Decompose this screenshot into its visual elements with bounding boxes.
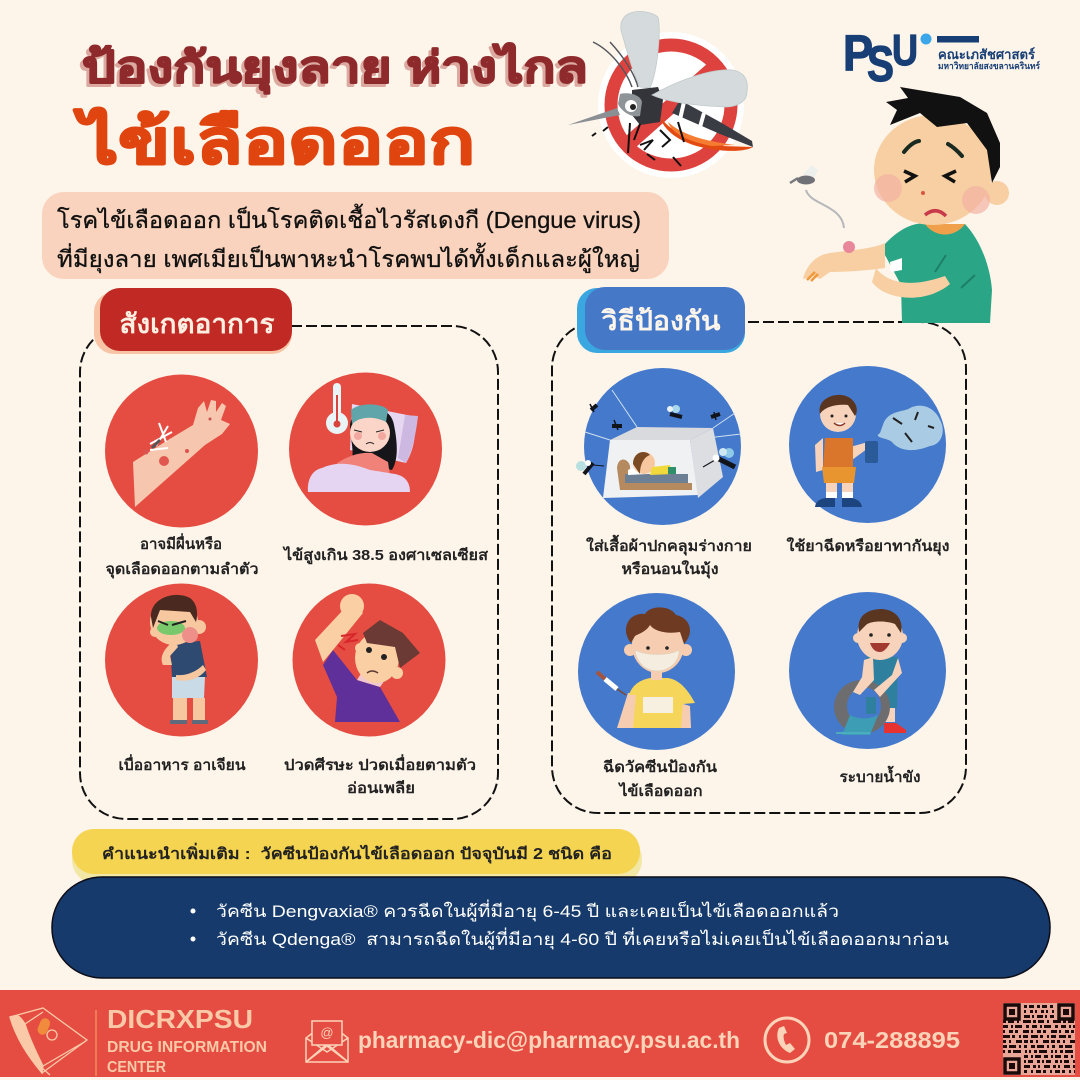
icon: phone	[765, 1018, 809, 1062]
callout: extra advice heading: คำแนะนำเพิ่มเติม : วัคซีนป้องกันไข้เลือดออก ปัจจุบันมี 2 ชนิด คือ	[102, 842, 612, 864]
caption: clothing and net	[586, 534, 752, 579]
panel: symptoms	[80, 288, 498, 819]
mosquitoes around net	[576, 404, 735, 474]
dashed frame: prevention	[552, 322, 966, 813]
email: pharmacy-dic@pharmacy.psu.ac.th	[358, 1027, 740, 1053]
title line 2: ไข้เลือดออก	[73, 107, 475, 176]
caption: fever: ไข้สูงเกิน 38.5 องศาเซลเซียส	[282, 545, 489, 565]
heading: prevention	[577, 287, 745, 353]
heading: symptoms	[94, 288, 292, 354]
caption: vaccination: ไข้เลือดออก	[617, 781, 702, 800]
intro callout	[42, 192, 669, 279]
panel: prevention	[552, 287, 966, 813]
caption: vaccination: ฉีดวัคซีนป้องกัน	[603, 759, 718, 776]
icon: no mosquito sign	[568, 11, 753, 178]
dashed frame: symptoms	[80, 326, 498, 819]
icon: high fever	[289, 372, 442, 526]
caption: drain water: ระบายน้ำขัง	[840, 765, 920, 786]
caption: headache: อ่อนเพลีย	[347, 780, 415, 797]
caption: vaccination	[603, 759, 718, 800]
icon: vomiting boy	[105, 584, 258, 736]
icon: headache	[292, 584, 446, 736]
caption: rash	[106, 533, 258, 579]
brand name	[107, 1004, 267, 1076]
logo: PSU: P	[843, 25, 873, 81]
brand name: CENTER	[107, 1059, 166, 1076]
caption: repellent: ใช้ยาฉีดหรือยาทากันยุง	[786, 537, 950, 556]
caption: clothing and net: หรือนอนในมุ้ง	[622, 560, 718, 579]
heading: prevention: วิธีป้องกัน	[601, 306, 721, 336]
title	[73, 42, 588, 176]
icon: envelope: @	[320, 1025, 334, 1040]
title line 1: ป้องกันยุงลาย ห่างไกล	[82, 42, 588, 95]
heading: symptoms: สังเกตอาการ	[120, 309, 275, 339]
caption: nausea: เบื่ออาหาร อาเจียน	[118, 754, 246, 774]
brand name: DRUG INFORMATION	[107, 1039, 267, 1056]
vaccine line 1: วัคซีน Dengvaxia® ควรฉีดในผู้ที่มีอายุ 6-45 ปี และเคยเป็นไข้เลือดออกแล้ว	[216, 899, 839, 922]
logo: PSU: คณะเภสัชศาสตร์	[938, 47, 1035, 62]
caption: clothing and net: ใส่เสื้อผ้าปกคลุมร่างกาย	[586, 534, 752, 556]
caption: headache: ปวดศีรษะ ปวดเมื่อยตามตัว	[284, 754, 476, 774]
panel: vaccine details	[52, 877, 1050, 978]
phone number: 074-288895	[824, 1027, 960, 1053]
illustration: boy with mosquito bite	[790, 87, 1009, 323]
brand name: DICRXPSU	[107, 1004, 253, 1034]
intro line 2: ที่มียุงลาย เพศเมียเป็นพาหะนำโรคพบได้ทั้งเด็กและผู้ใหญ่	[57, 243, 640, 273]
vaccine line 2: วัคซีน Qdenga® สามารถฉีดในผู้ที่มีอายุ 4-60 ปี ที่เคยหรือไม่เคยเป็นไข้เลือดออกมาก่อน	[216, 927, 949, 950]
icon: draining water	[789, 592, 946, 749]
logo: PSU: U	[892, 26, 918, 75]
logo: PSU: S	[867, 36, 894, 92]
caption: rash: อาจมีผื่นหรือ	[140, 533, 222, 553]
icon: small mosquito	[790, 165, 844, 228]
caption: headache	[284, 754, 476, 797]
divider	[95, 1010, 97, 1076]
icon: mosquito net	[576, 368, 741, 525]
QR code	[1003, 1003, 1075, 1075]
logo: PSU	[843, 25, 1040, 92]
icon: book	[10, 1008, 87, 1075]
footer	[0, 990, 1080, 1077]
intro line 1: โรคไข้เลือดออก เป็นโรคติดเชื้อไวรัสเดงกี (Dengue virus)	[57, 204, 641, 233]
caption: rash: จุดเลือดออกตามลำตัว	[106, 561, 258, 579]
icon: rash on arm	[105, 374, 258, 528]
icon: repellent spray	[789, 366, 946, 523]
icon: vaccination	[578, 593, 735, 750]
logo: PSU: มหาวิทยาลัยสงขลานครินทร์	[938, 60, 1040, 71]
icon: envelope	[306, 1021, 348, 1062]
callout: extra advice heading	[72, 829, 642, 884]
